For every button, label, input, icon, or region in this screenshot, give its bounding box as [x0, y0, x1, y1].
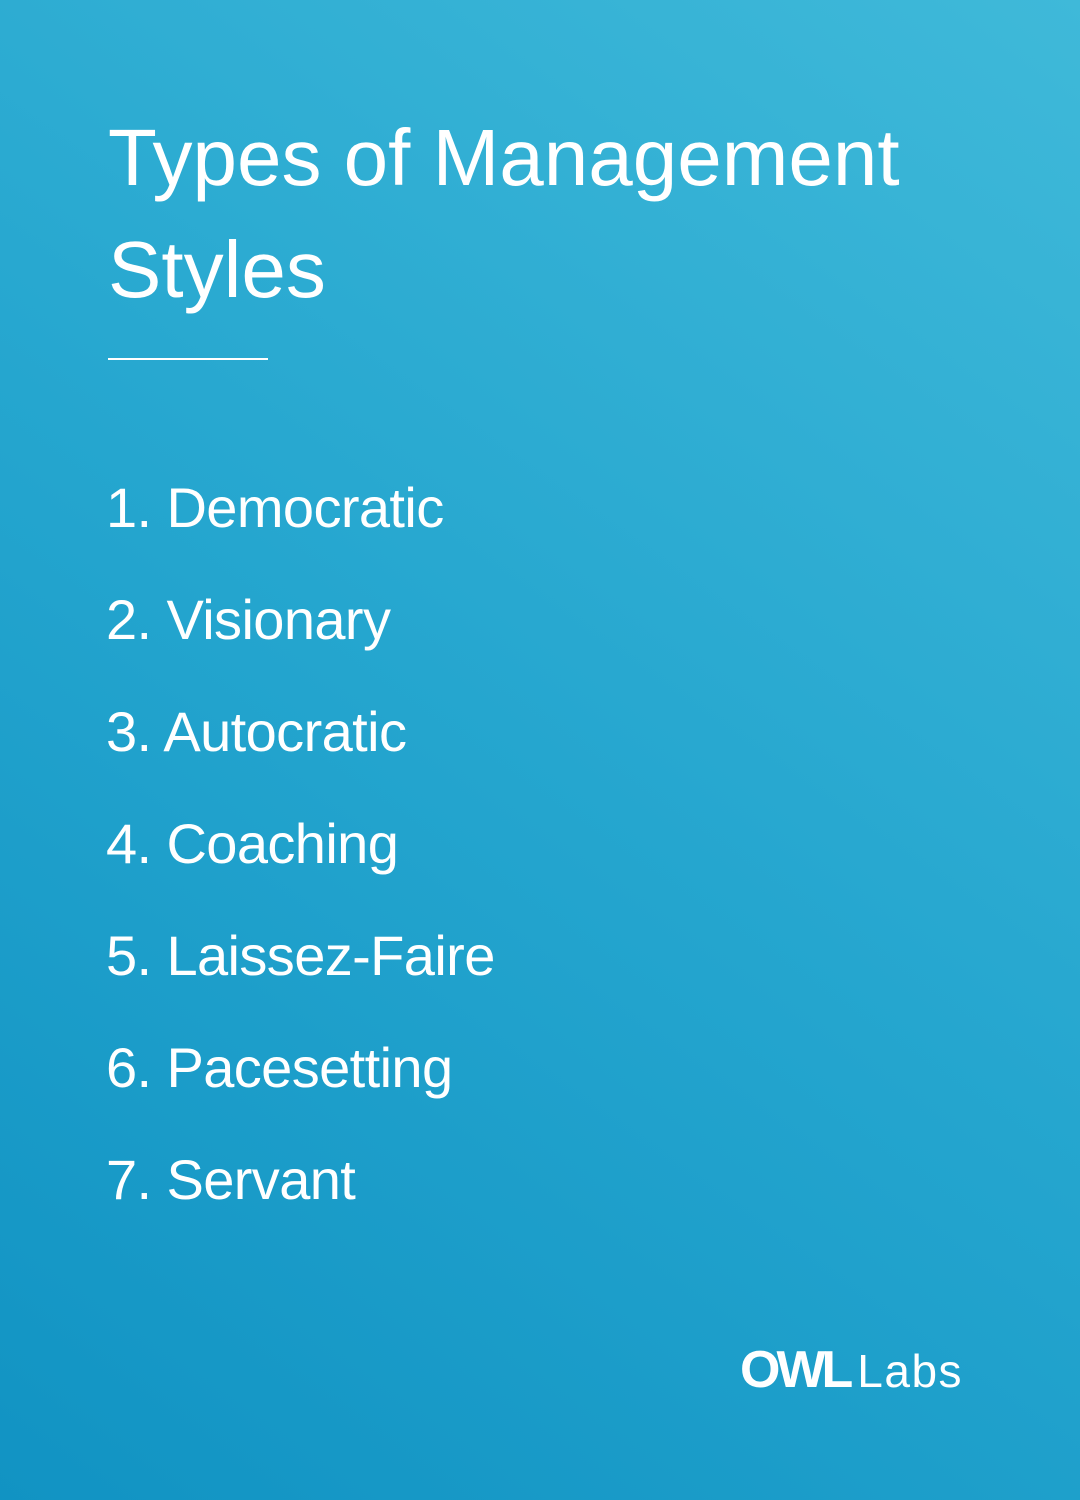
- list of management styles: [106, 476, 495, 1211]
- list of management styles: 7. Servant: [106, 1148, 355, 1211]
- title: [108, 113, 900, 314]
- list of management styles: 3. Autocratic: [106, 700, 406, 763]
- logo: Owl Labs: OWLLabs: [740, 1341, 963, 1399]
- list of management styles: 5. Laissez-Faire: [106, 924, 495, 987]
- title underline: [108, 358, 268, 360]
- title: Types of Management: [108, 113, 900, 202]
- title: Styles: [108, 225, 326, 314]
- list of management styles: 2. Visionary: [106, 588, 390, 651]
- list of management styles: 4. Coaching: [106, 812, 398, 875]
- list of management styles: 6. Pacesetting: [106, 1036, 452, 1099]
- list of management styles: 1. Democratic: [106, 476, 444, 539]
